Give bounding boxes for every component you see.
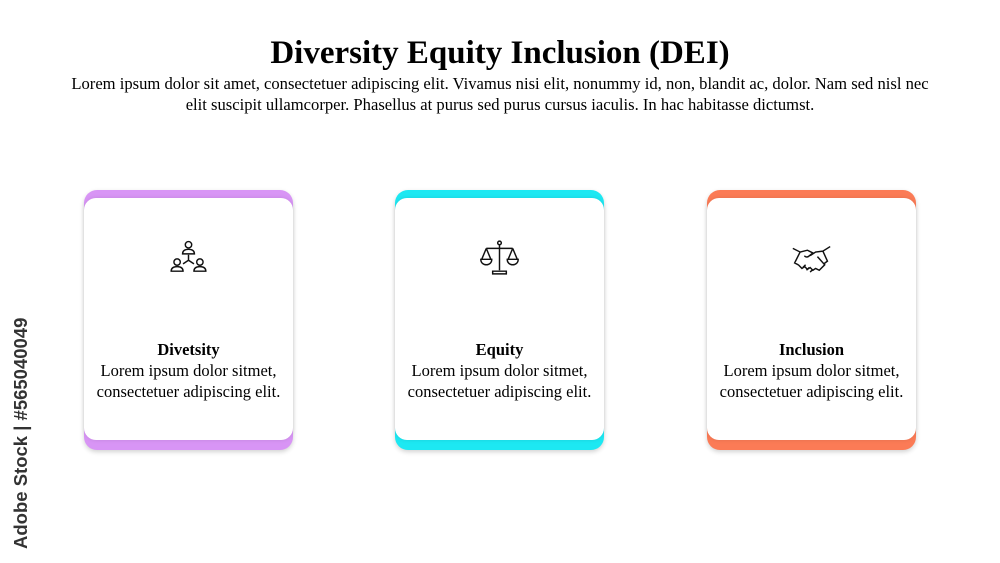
side watermark text: Adobe Stock | #565040049 xyxy=(10,318,31,549)
text: inclusion: Lorem ipsum dolor sitmet, xyxy=(724,361,899,380)
text: equity: Equity xyxy=(476,340,523,359)
title: Diversity Equity Inclusion (DEI) xyxy=(270,35,730,71)
text: diversity: consectetuer adipiscing elit. xyxy=(97,382,280,401)
text: equity: Lorem ipsum dolor sitmet, xyxy=(412,361,587,380)
icon: handshake xyxy=(792,246,830,273)
text: diversity: Lorem ipsum dolor sitmet, xyxy=(100,361,276,380)
text: inclusion: Inclusion xyxy=(779,340,844,359)
text: diversity xyxy=(97,340,280,401)
subtitle text xyxy=(71,74,929,114)
subtitle text: Lorem ipsum dolor sit amet, consectetuer adipiscing elit. Vivamus nisi elit, nonummy id, non, blandit ac, dolor. Nam sed nisl nec xyxy=(71,74,929,93)
panel: inclusion xyxy=(707,190,916,450)
icon: people network xyxy=(170,240,207,272)
text: equity: consectetuer adipiscing elit. xyxy=(408,382,591,401)
text: diversity: Divetsity xyxy=(157,340,220,359)
text: inclusion: consectetuer adipiscing elit. xyxy=(720,382,903,401)
icon: scales xyxy=(480,240,519,275)
subtitle text: elit suscipit ullamcorper. Phasellus at purus sed purus cursus iaculis. In hac habitasse dictumst. xyxy=(186,94,814,114)
text: equity xyxy=(408,340,591,401)
text: inclusion xyxy=(720,340,903,401)
panel: diversity xyxy=(84,190,293,450)
panel: equity xyxy=(395,190,604,450)
